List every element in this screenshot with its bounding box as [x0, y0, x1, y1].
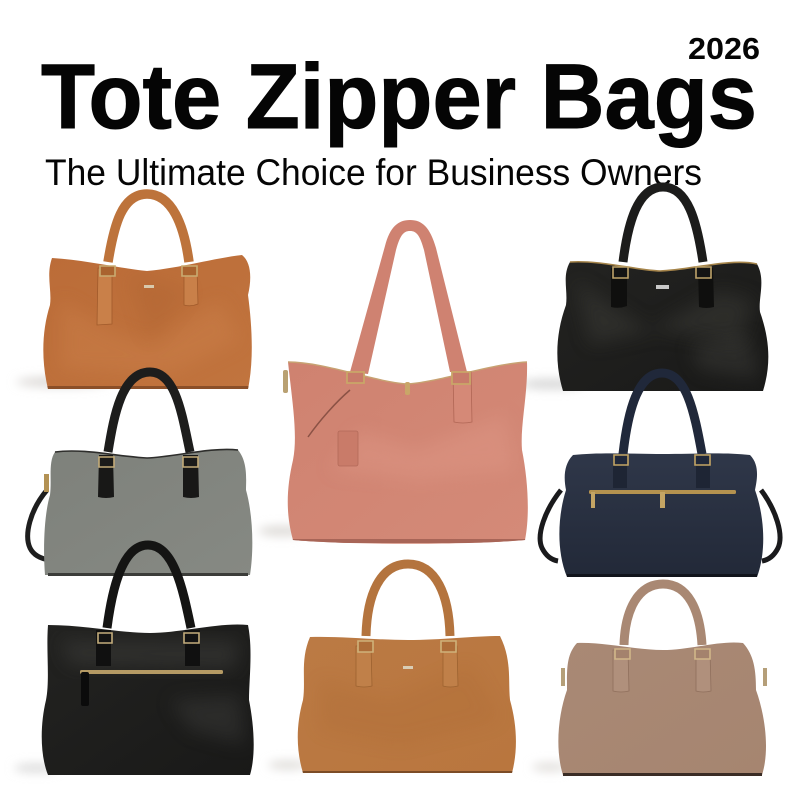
orange handle	[108, 194, 189, 262]
taupe strap tabs	[613, 650, 711, 692]
zip tote pull	[81, 672, 89, 706]
tan handle	[366, 564, 450, 636]
black handle	[623, 187, 703, 262]
orange logo	[144, 285, 154, 288]
zip tote body	[42, 624, 254, 775]
black strap tabs	[611, 268, 714, 308]
navy buckles	[614, 455, 710, 465]
navy body	[559, 453, 763, 577]
zip tote handle	[107, 545, 191, 628]
subtitle: The Ultimate Choice for Business Owners	[45, 152, 702, 193]
taupe buckles	[615, 649, 710, 659]
navy shoulder straps	[540, 490, 780, 561]
hang tag	[338, 431, 358, 466]
bag: orange tote	[16, 194, 254, 389]
grey shoulder strap	[28, 490, 50, 560]
title: Tote Zipper Bags	[41, 46, 757, 148]
pink handle	[350, 220, 467, 374]
pink buckles	[347, 372, 470, 384]
bag: black tote top right	[520, 187, 768, 391]
zipper pull	[283, 370, 288, 393]
orange body	[43, 255, 252, 389]
taupe body	[558, 642, 766, 775]
black body	[557, 262, 768, 391]
bag: taupe satchel	[532, 584, 767, 776]
black zipper rim	[570, 262, 757, 271]
bag: black zip tote	[14, 545, 254, 775]
grey body	[44, 449, 252, 575]
tan logo	[403, 666, 413, 669]
bag: tan satchel	[268, 564, 516, 774]
black logo	[656, 285, 669, 289]
black buckles	[613, 267, 711, 278]
navy strap tabs	[613, 458, 710, 488]
pink zipper rim	[288, 362, 527, 384]
centre clip	[405, 382, 410, 395]
year label: 2026	[688, 31, 760, 66]
taupe handle	[624, 584, 702, 645]
bag: navy satchel	[540, 373, 780, 577]
grey handle	[108, 372, 190, 452]
tan body	[298, 636, 516, 773]
cord	[308, 390, 350, 437]
grey clip	[44, 474, 49, 492]
zip tote strap tabs	[96, 630, 200, 666]
pink strap tab	[453, 372, 472, 423]
tan buckles	[358, 641, 456, 652]
taupe clips	[561, 668, 767, 686]
tan strap tabs	[356, 646, 458, 687]
orange buckles	[100, 266, 197, 276]
bag: pink centre tote	[258, 220, 530, 544]
bag: grey satchel	[28, 372, 252, 576]
zip tote buckles	[98, 633, 199, 643]
grey strap tabs	[98, 455, 199, 498]
navy zipper pulls	[591, 492, 665, 508]
navy zipper	[589, 490, 736, 494]
navy handle	[623, 373, 702, 454]
zip tote zipper	[80, 670, 223, 674]
pink body	[288, 362, 528, 544]
grey buckles	[99, 457, 198, 467]
orange strap tabs	[97, 268, 198, 325]
